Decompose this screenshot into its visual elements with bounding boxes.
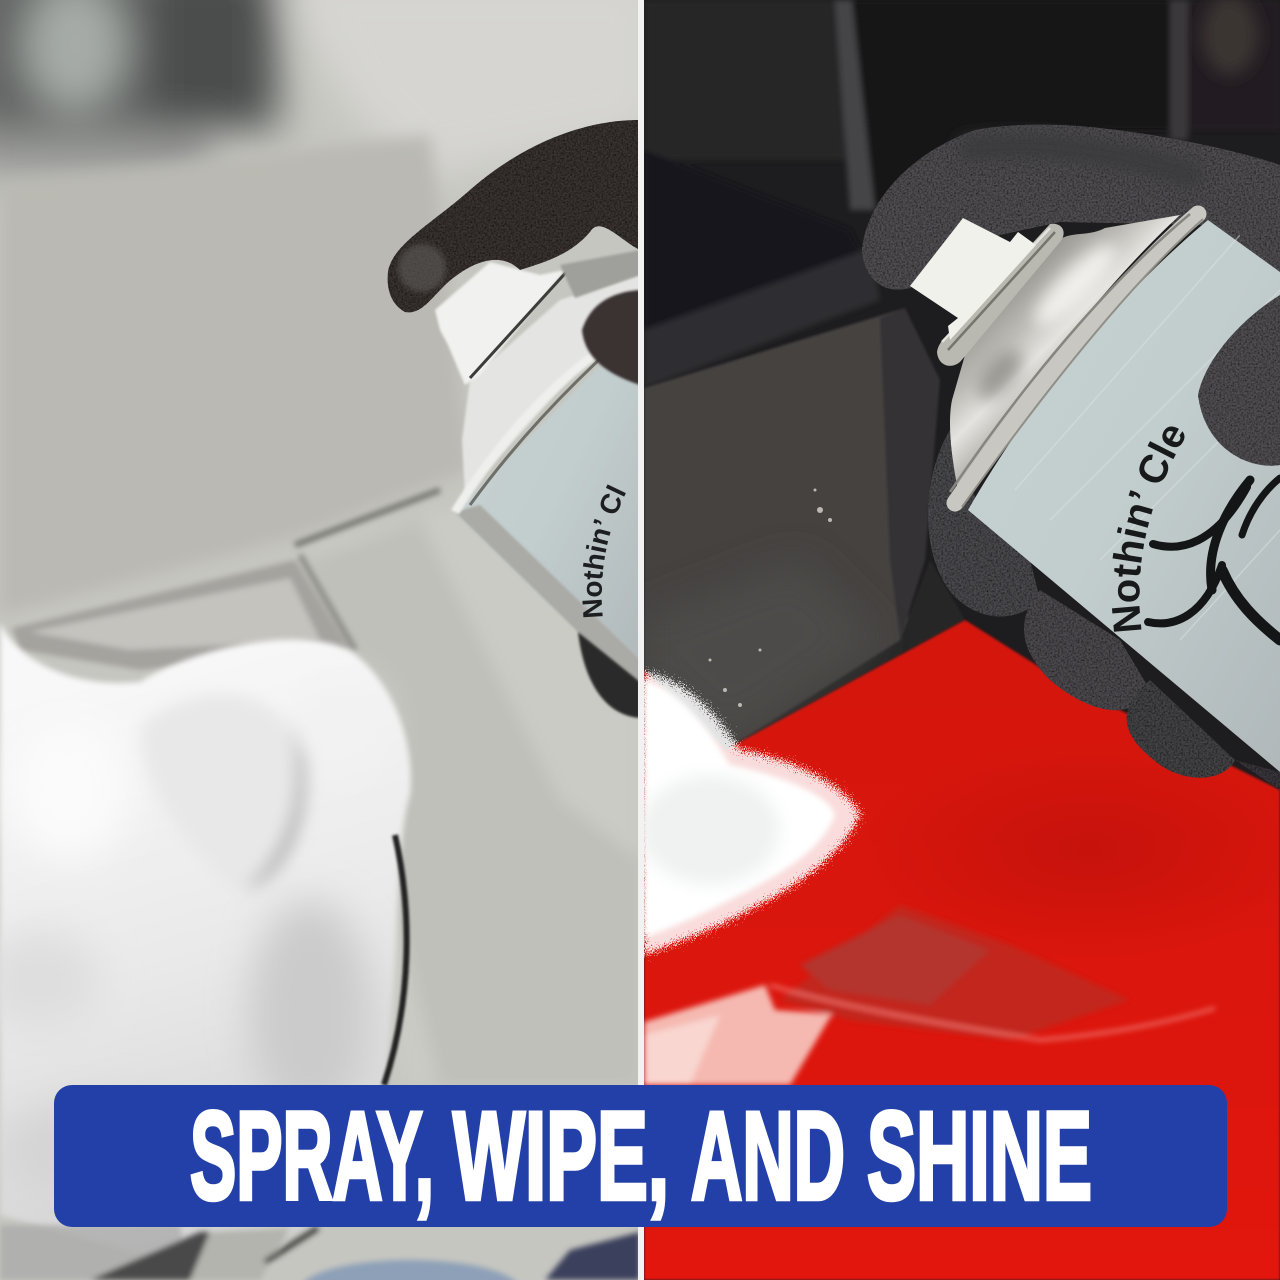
banner title: SHINE <box>867 1087 1092 1226</box>
nozzle ring <box>937 224 1064 366</box>
foam mass <box>0 622 411 1268</box>
glove on left <box>388 120 640 718</box>
nozzle <box>435 262 565 385</box>
glove back arch <box>862 125 1280 290</box>
panel: right colour photo <box>644 0 1280 1280</box>
can body with label: Nothin’ Cle <box>1112 426 1184 632</box>
banner <box>54 1085 1227 1227</box>
foam spray <box>640 672 860 955</box>
banner title: SPRAY, <box>190 1087 434 1226</box>
dome <box>950 215 1180 490</box>
banner title: WIPE, <box>453 1087 669 1226</box>
red car bonnet <box>644 620 1280 1280</box>
can brand text <box>1139 392 1215 632</box>
door panel <box>2 132 462 608</box>
panel: left greyscale photo <box>0 0 638 1280</box>
label text <box>602 445 655 618</box>
grey plastic trim <box>644 308 965 750</box>
centre divider <box>638 0 644 1280</box>
door handle recess <box>12 490 440 670</box>
banner title <box>190 1087 1092 1226</box>
bull logo <box>1148 478 1280 640</box>
sign reflection on bonnet <box>644 905 1215 1085</box>
banner title: AND <box>691 1087 845 1226</box>
lower left bottom detail <box>0 1225 640 1280</box>
can label <box>434 261 638 681</box>
can rim <box>955 214 1198 503</box>
car trim top <box>644 0 1192 386</box>
dome <box>462 275 640 495</box>
thumb on can <box>1198 295 1280 466</box>
trim speckles <box>708 488 832 707</box>
blurred background interior <box>0 0 660 180</box>
glove lower fingers <box>928 430 1280 790</box>
white nozzle <box>910 218 1036 340</box>
can label: Nothin’ Cl <box>582 484 626 618</box>
can body with label <box>910 206 1280 772</box>
black door seal line <box>384 835 407 1085</box>
